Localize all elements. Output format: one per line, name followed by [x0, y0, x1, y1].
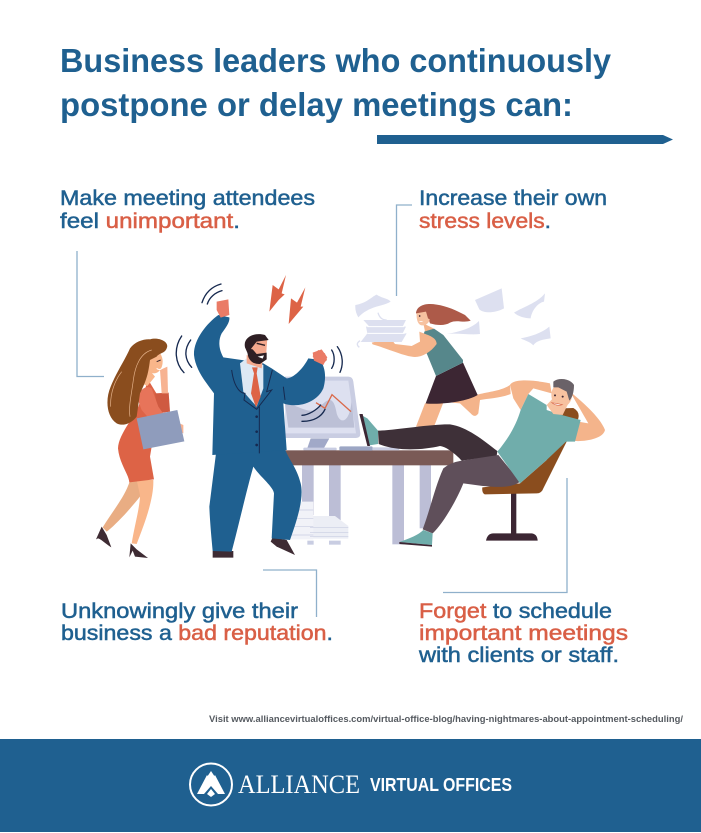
- desk: [283, 446, 453, 545]
- connector: reputation: [263, 570, 316, 617]
- paper stack on floor: [289, 502, 348, 539]
- woman with folder: [96, 339, 184, 558]
- logo subtitle: VIRTUAL OFFICES: [370, 775, 512, 795]
- illustration: desk and right figures: [283, 288, 605, 547]
- text: stress levels: Increase their own: [419, 187, 607, 210]
- text: unimportant: feel unimportant .: [60, 210, 240, 233]
- relaxing man: [359, 379, 605, 547]
- paper stack held: [357, 313, 407, 347]
- connector: stress: [396, 205, 412, 296]
- text: stress levels: stress levels .: [419, 210, 551, 233]
- icon: Alliance logo: [190, 764, 232, 806]
- text: bad reputation: business a bad reputation .: [61, 622, 333, 645]
- text: forget meetings: [418, 600, 628, 667]
- footer band: [0, 739, 701, 832]
- text: unimportant: [60, 187, 315, 233]
- lightning bolts: [269, 275, 305, 324]
- text: unimportant: Make meeting attendees: [60, 187, 315, 210]
- shouting arcs: [176, 284, 342, 421]
- connector: forget: [443, 478, 567, 592]
- text: forget meetings: Forget to schedule: [419, 600, 612, 623]
- title: postpone or delay meetings can:: [60, 86, 573, 123]
- running woman: [372, 304, 511, 427]
- title: Business leaders who continuously: [60, 42, 612, 79]
- connector: unimportant: [77, 251, 104, 376]
- text: stress levels: [419, 187, 607, 233]
- text: forget meetings: with clients or staff.: [418, 644, 619, 667]
- title underline arrow bar: [377, 135, 673, 144]
- text: bad reputation: [61, 600, 333, 645]
- title: [60, 42, 612, 123]
- flying papers: [355, 288, 551, 345]
- illustration: left figures: [96, 275, 342, 558]
- text: forget meetings: important meetings: [419, 622, 628, 645]
- monitor: [285, 377, 360, 451]
- logo wordmark: ALLIANCE: [238, 770, 360, 799]
- source URL: Visit www.alliancevirtualoffices.com/virtual-office-blog/having-nightmares-about-appointment-scheduling/: [209, 714, 683, 725]
- fist right: [313, 350, 327, 365]
- text: bad reputation: Unknowingly give their: [61, 600, 298, 623]
- angry boss: [194, 299, 327, 558]
